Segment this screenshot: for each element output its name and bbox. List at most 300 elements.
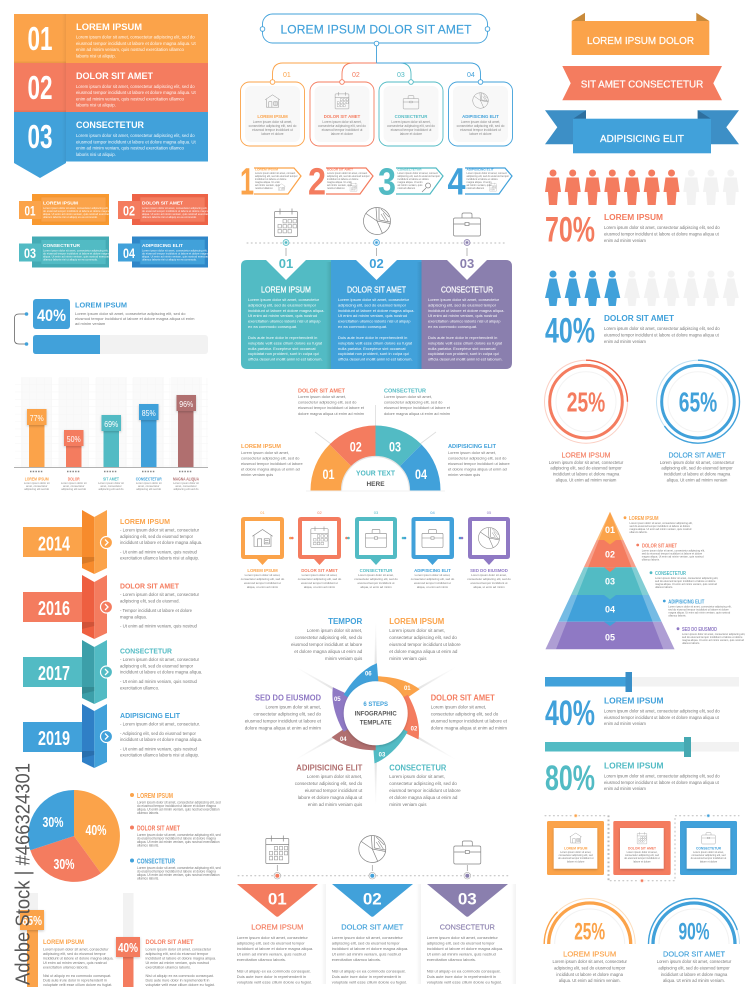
people stat 40%: Lorem ipsum dolor sit amet, consectetur adipiscing elit, sed do [604, 326, 720, 331]
step: consectetur [389, 764, 461, 807]
half ring 90%: 90% [678, 918, 710, 946]
label: lorem ipsum: et dolore magna aliqua ut enim ad [241, 466, 300, 472]
banner 01: eiusmod tempor incididunt ut labore et dolore magna aliqua. Ut [76, 41, 196, 46]
square 03: consectetur adipiscing elit, sed do [354, 577, 398, 581]
people stat 70%: 70% [545, 210, 595, 250]
step: dolor sit amet: dolore magna aliqua ut enim ad minim [431, 726, 507, 730]
40% bar [116, 893, 216, 987]
triangle 02: DOLOR SIT AMET [341, 922, 404, 932]
pyramid label 3: ullamco laboris. [655, 585, 673, 589]
arrow 3: adipiscing elit, sed do eiusmod tempor [398, 175, 440, 178]
triangle 01: Lorem ipsum dolor sit amet, consectetur [237, 935, 309, 940]
axis labels: MAGNA ALIQUA [173, 476, 199, 482]
center label: 6 STEPS [363, 702, 388, 708]
axis label captions: Lorem ipsum dolor sit [98, 481, 124, 485]
bar 85%: 85% [142, 409, 156, 418]
step: consectetur: Lorem ipsum dolor sit amet, [389, 774, 445, 779]
column 03: voluptate velit esse cillum dolore eu fugiat [428, 340, 503, 346]
column 02: adipiscing elit, sed do eiusmod tempor [338, 302, 407, 308]
square coral: consectetur adipiscing elit, sed [625, 854, 660, 857]
timeline 2019: exercitation ullamco laboris nisi ut aliquip. [120, 752, 199, 758]
icon: briefcase [454, 213, 480, 236]
timeline 2017: incididunt ut labore et dolore magna aliqua. [120, 670, 202, 674]
square coral [613, 821, 671, 875]
pyramid label 5: Lorem ipsum dolor sit amet, consectetur adipiscing elit, [682, 632, 745, 636]
timeline 2019: 2019 [38, 728, 70, 750]
box 02: eiusmod tempor incididunt ut [322, 128, 362, 132]
pyramid layers [546, 512, 674, 649]
65% bar: Lorem ipsum dolor sit amet, consectetur [43, 948, 109, 952]
column 03: Lorem ipsum dolor sit amet, consectetur [428, 297, 500, 302]
pie legend: do eiusmod tempor incididunt ut labore et dolore magna [137, 836, 216, 840]
banner 02: eiusmod tempor incididunt ut labore et dolore magna aliqua. Ut [76, 90, 196, 95]
card 02: do eiusmod tempor incididunt ut labore et dolore magna [142, 209, 209, 213]
label: adipisicing elit: et dolore magna aliqua ut enim ad [448, 466, 507, 472]
column 01: officia deserunt mollit anim id est laborum. [248, 356, 323, 362]
card 02 [118, 194, 213, 225]
step: dolor sit amet: Lorem ipsum dolor sit amet, [431, 704, 486, 710]
triangle 03: 03 [458, 890, 477, 908]
box 04: eiusmod tempor incididunt ut [460, 128, 501, 132]
square 04: 04 [430, 510, 435, 515]
box 02: DOLOR SIT AMET [324, 114, 361, 119]
banner 01: Lorem ipsum dolor sit amet, consectetur adipiscing elit, sed do [76, 34, 195, 40]
step: sed do eiusmod [245, 694, 322, 730]
people stat 70%: enim ad minim veniam [604, 238, 646, 243]
column 02: nulla pariatur. Excepteur sint occaecat [338, 346, 406, 351]
arrow 2: ad minim veniam, quis [327, 184, 353, 187]
card 03: Lorem ipsum dolor sit amet, consectetur adipiscing elit, sed [43, 248, 114, 252]
column 01: ex ea commodo consequat. [248, 324, 297, 329]
icon: calendar [274, 208, 298, 236]
timeline 2016: adipiscing elit, sed do eiusmod. [120, 598, 180, 604]
65% bar: Nisi ut aliquip ex ea commodo consequat. [43, 974, 111, 978]
square 04: eiusmod tempor incididunt ut [414, 581, 451, 585]
banner 03: Lorem ipsum dolor sit amet, consectetur adipiscing elit, sed do [76, 133, 195, 138]
arrow 3: magna aliqua. Ut enim [398, 181, 423, 184]
pie legend: Lorem ipsum dolor sit amet, consectetur adipiscing elit, sed [137, 833, 221, 837]
step: lorem ipsum: eiusmod tempor incididunt ut labore [389, 642, 461, 647]
panel: big number arrows [240, 162, 512, 204]
axis label captions: Lorem ipsum dolor sit [61, 481, 87, 485]
box 03: consectetur adipiscing elit, sed do [387, 124, 435, 128]
triangle 02: adipiscing elit, sed do eiusmod tempor [332, 940, 400, 946]
label: dolor sit amet: DOLOR SIT AMET [298, 388, 346, 394]
triangle 01: incididunt ut labore et dolore magna aliqua. [237, 946, 313, 951]
panel: three triangles [237, 836, 516, 985]
axis labels: DOLOR [68, 476, 80, 482]
ring 25%: aliqua. Ut enim ad minim veniam [556, 478, 617, 482]
triangle 01: LOREM IPSUM [251, 922, 303, 932]
column 02: incididunt ut labore et dolore magna aliqua. [338, 308, 414, 313]
65% bar: LOREM IPSUM [43, 940, 84, 946]
axis label captions: amet, consectetur [100, 484, 122, 488]
progress stat 40%: LOREM IPSUM [604, 696, 664, 706]
timeline 2019: - Adipiscing elit, sed do eiusmod tempor [120, 731, 197, 736]
pyramid label 4: magna aliqua. Ut enim ad minim veniam, quis nostrud [668, 610, 731, 614]
ring 65%: incididunt ut labore et dolore magna [664, 472, 731, 476]
square orange: labore et dolore [567, 860, 585, 864]
pie legend: Lorem ipsum dolor sit amet, consectetur adipiscing elit, sed [137, 866, 221, 870]
step: adipisicing elit [295, 764, 363, 807]
arrow 3: nostrud ullamco [398, 187, 416, 190]
column 02: cupidatat non proident, sunt in culpa qui [338, 351, 409, 356]
label: consectetur: consectetur adipiscing elit, sed do [384, 400, 442, 404]
center label [355, 702, 397, 726]
timeline 2016: magna aliqua. [120, 614, 147, 620]
65% bar: 65% [22, 913, 42, 928]
timeline 2017: CONSECTETUR [120, 646, 173, 656]
axis label captions: amet, consectetur [26, 484, 47, 488]
pyramid label 1: Lorem ipsum dolor sit amet, consectetur adipiscing elit, [630, 521, 693, 525]
pie legend: aliqua. Ut enim ad minim veniam, quis nostrud exercitation [137, 873, 220, 877]
card 02: Lorem ipsum dolor sit amet, consectetur adipiscing elit, sed [142, 206, 213, 210]
column 02 [331, 256, 422, 369]
65% bar: Duis aute irure dolor in reprehenderit in [43, 978, 107, 982]
column 01: cupidatat non proident, sunt in culpa qui [248, 351, 319, 356]
triangle 02: 02 [363, 890, 382, 908]
card 04: aliqua. Ut enim ad minim veniam, quis nostrud exercitation [142, 254, 212, 258]
ribbon 1: LOREM IPSUM DOLOR [587, 36, 694, 47]
axis label captions: adipiscing elit sed do [61, 487, 87, 491]
pie chart: 40% [86, 822, 106, 839]
pyramid label 5: SED DO EIUSMOD [682, 627, 717, 633]
card 03: aliqua. Ut enim ad minim veniam, quis nostrud exercitation [43, 254, 113, 258]
box 04: ADIPISICING ELIT [462, 114, 499, 119]
pie legend [130, 791, 221, 880]
card 03 [19, 236, 114, 268]
arrow 2 [308, 162, 373, 204]
label: dolor sit amet: dolore magna aliqua ut enim ad minim [298, 411, 364, 416]
pyramid label 2: Lorem ipsum dolor sit amet, consectetur adipiscing elit, [642, 548, 705, 552]
ribbon 2 [562, 66, 722, 100]
column 02: ex ea commodo consequat. [338, 324, 387, 329]
square coral: labore et dolore [633, 860, 651, 864]
banner 03: enim ad minim veniam, quis nostrud exercitation ullamco [76, 146, 185, 150]
axis label captions: adipiscing elit sed do [136, 487, 162, 491]
arrow 1: nostrud ullamco [255, 187, 273, 190]
progress stat 40%: 40% [545, 694, 595, 733]
progress stat 40% [545, 672, 739, 733]
pyramid label 4: Lorem ipsum dolor sit amet, consectetur adipiscing elit, [668, 604, 732, 608]
pyramid label 4: ADIPISICING ELIT [668, 599, 705, 605]
arrow 1 [240, 162, 301, 204]
timeline 2019: incididunt ut labore et dolore magna aliqua. [120, 737, 202, 742]
ring 65%: adipiscing elit, sed do eiusmod tempor [661, 466, 733, 470]
timeline 2017: adipiscing elit, sed do eiusmod tempor [120, 664, 194, 668]
half ring 90%: adipiscing elit, sed do eiusmod tempor [658, 966, 730, 970]
panel: semicircle diagram [241, 388, 510, 491]
pyramid label 1: ullamco laboris. [630, 530, 648, 534]
step: lorem ipsum: minim veniam quis [389, 656, 427, 661]
step: consectetur: eiusmod tempor incididunt ut labore [389, 788, 461, 793]
card 03: do eiusmod tempor incididunt ut labore et dolore magna [43, 252, 110, 256]
card 01: do eiusmod tempor incididunt ut labore et dolore magna [43, 209, 110, 213]
pyramid label 1 [624, 516, 693, 534]
square 02: 02 [317, 510, 322, 515]
timeline 2014: incididunt ut labore et dolore magna aliqua. [120, 540, 202, 545]
label: consectetur: dolore magna aliqua ut enim ad minim [384, 411, 450, 416]
square 03: Lorem ipsum dolor sit amet, [358, 573, 394, 577]
square 04: aliqua, ut enim ad minim [417, 585, 449, 589]
step: tempor: consectetur adipiscing elit, sed do [295, 635, 363, 640]
square 03: aliqua, ut enim ad minim [360, 585, 392, 589]
title frame: LOREM IPSUM DOLOR SIT AMET [280, 22, 472, 36]
65% bar: voluptate velit esse cillum dolore eu fugiat. [43, 983, 112, 987]
progress stat 80%: eiusmod tempor incididunt ut labore et dolore magna aliqua ut [604, 780, 720, 785]
arrow 4: ADIPISICING ELIT [466, 168, 494, 172]
ribbon 3 [545, 110, 739, 153]
half ring 90%: Lorem ipsum dolor sit amet, consectetur [657, 959, 732, 964]
timeline 2017: 2017 [38, 663, 70, 685]
step: sed do eiusmod: Lorem ipsum dolor sit amet, [265, 704, 321, 710]
people stat 40%: enim ad minim veniam [604, 339, 646, 344]
banner 02 [14, 63, 208, 112]
pictogram row [545, 270, 739, 306]
panel: semicircle diagram: 02 [350, 438, 362, 454]
box 01: 01 [283, 72, 291, 79]
label: dolor sit amet [298, 388, 365, 416]
square 02: consectetur adipiscing elit, sed do [298, 577, 342, 581]
panel: 40% progress bar: 40% [37, 306, 66, 325]
label: adipisicing elit: consectetur adipiscing elit, sed do [448, 456, 506, 460]
40% bar: Nisi ut aliquip ex ea commodo consequat. [146, 974, 214, 978]
ring 25%: 25% [567, 387, 605, 418]
arrow 2: magna aliqua. Ut enim [327, 181, 352, 184]
timeline 2014: - Ut enim ad minim veniam, quis nostrud [120, 550, 198, 554]
column 01: Lorem ipsum dolor sit amet, consectetur [248, 297, 320, 302]
timeline 2017: - Lorem ipsum dolor sit amet, consectetur [120, 657, 200, 662]
triangle 03: incididunt ut labore et dolore magna aliqua. [427, 946, 503, 951]
people stat 70%: Lorem ipsum dolor sit amet, consectetur adipiscing elit, sed do [604, 225, 720, 230]
label: dolor sit amet: consectetur adipiscing elit, sed do [298, 400, 356, 404]
box 03: labore et dolore [400, 132, 422, 136]
axis label captions: adipiscing elit sed do [99, 487, 124, 491]
banner 02: 02 [28, 69, 52, 106]
column 01: 01 [279, 256, 293, 271]
axis labels [25, 476, 199, 482]
label: lorem ipsum: minim veniam quis [241, 472, 273, 477]
square 03: eiusmod tempor incididunt ut [358, 581, 395, 585]
banner 02: DOLOR SIT AMET [76, 71, 153, 82]
axis labels: CONSECTETUR [136, 476, 162, 482]
bar 96% [176, 395, 196, 467]
arrow 2: adipiscing elit, sed do eiusmod tempor [327, 175, 370, 178]
step: sed do eiusmod: consectetur adipiscing elit, sed do [253, 712, 321, 716]
arrow 4 [448, 162, 512, 204]
triangle 02: voluptate velit esse cillum dolore eu fugiat. [332, 980, 407, 985]
square 05: SED DO EIUSMOD [470, 568, 508, 573]
pyramid label 5: magna aliqua. Ut enim ad minim veniam, quis nostrud [682, 638, 744, 642]
ring 65%: DOLOR SIT AMET [668, 452, 726, 460]
column 01 [241, 256, 331, 369]
label: adipisicing elit [448, 444, 510, 477]
box 04 [448, 72, 512, 146]
column 01: Ut enim ad minim veniam, quis nostrud [248, 313, 317, 318]
triangle 01: voluptate velit esse cillum dolore eu fugiat. [237, 980, 312, 985]
column 02: officia deserunt mollit anim id est laborum. [338, 356, 413, 362]
box 04: consectetur adipiscing elit, sed do [457, 124, 505, 128]
card 01: LOREM IPSUM [43, 200, 78, 206]
bar 77%: 77% [30, 414, 44, 423]
square 02: aliqua, ut enim ad minim [304, 585, 336, 589]
card 02: ullamco laboris nisi ut aliquip ex ea commodo. [142, 215, 197, 219]
square 01: eiusmod tempor incididunt ut [244, 581, 281, 585]
step: dolor sit amet: eiusmod tempor incididunt ut labore et [431, 718, 508, 724]
step: sed do eiusmod: dolore magna aliqua ut enim ad minim [245, 726, 321, 730]
banner 01: LOREM IPSUM [76, 22, 142, 33]
half ring 25% [544, 898, 635, 983]
square orange: LOREM IPSUM [564, 846, 588, 850]
progress stat 80%: Lorem ipsum dolor sit amet, consectetur adipiscing elit, sed do [604, 774, 720, 778]
people stat 70%: LOREM IPSUM [604, 213, 663, 222]
square 02: eiusmod tempor incididunt ut [301, 581, 338, 585]
label: dolor sit amet: Lorem ipsum dolor sit amet, [298, 394, 346, 399]
progress stat 80%: enim ad minim veniam [604, 786, 646, 791]
banner 01 [14, 14, 208, 63]
box 01 [240, 72, 304, 146]
box 04: Lorem ipsum dolor sit amet, [461, 120, 500, 124]
panel: vertical timeline [23, 510, 202, 768]
step: tempor: TEMPOR [328, 617, 363, 626]
step: sed do eiusmod: eiusmod tempor incididunt ut labore et [245, 718, 322, 724]
label: adipisicing elit: Lorem ipsum dolor sit amet, [448, 450, 496, 455]
progress stat 40%: enim ad minim veniam [604, 721, 646, 726]
ring 65%: Lorem ipsum dolor sit amet, consectetur [660, 460, 735, 465]
square coral: do eiusmod tempor incididunt ut [624, 857, 660, 860]
label: lorem ipsum [241, 444, 303, 477]
arrow 2: nostrud ullamco [327, 187, 345, 190]
40% bar: exercitation ullamco laboris. [146, 966, 191, 970]
column 03: Ut enim ad minim veniam, quis nostrud [428, 313, 497, 318]
step: tempor: minim veniam quis [325, 656, 363, 661]
square 01: LOREM IPSUM [247, 568, 278, 573]
column 03: ex ea commodo consequat. [428, 324, 477, 329]
center label: TEMPLATE [360, 720, 392, 726]
square coral: DOLOR SIT AMET [628, 846, 656, 850]
ring 25%: LOREM IPSUM [562, 452, 611, 460]
column 03: exercitation ullamco laboris nisi ut aliquip [428, 318, 501, 324]
step: dolor sit amet [431, 694, 508, 730]
arrow 1: magna aliqua. Ut enim [255, 181, 280, 184]
card 01: Lorem ipsum dolor sit amet, consectetur adipiscing elit, sed [43, 206, 114, 210]
panel: five icon squares [241, 510, 511, 589]
panel: numbered stacked banners [14, 14, 208, 178]
box 04: 04 [467, 72, 475, 79]
65% bar [20, 893, 114, 987]
timeline 2019: - Ut enim ad minim veniam, quis nostrud [120, 746, 198, 752]
column 03: 03 [460, 256, 474, 271]
half ring 90%: DOLOR SIT AMET [663, 950, 725, 958]
step: consectetur: CONSECTETUR [389, 764, 447, 772]
column 01: Duis aute irure dolor in reprehenderit in [248, 335, 317, 340]
triangle 02: Duis aute irure dolor in reprehenderit in [332, 974, 401, 979]
half ring 25%: aliqua. Ut enim ad minim veniam. [559, 978, 621, 983]
card 03: 03 [24, 245, 36, 261]
step: adipisicing elit: ADIPISICING ELIT [296, 764, 362, 772]
pyramid label 2: ullamco laboris. [642, 558, 660, 562]
center label: INFOGRAPHIC [355, 712, 397, 718]
panel: pyramid: 03 [605, 576, 615, 586]
half ring 90%: aliqua. Ut enim ad minim veniam. [663, 978, 725, 983]
square orange [547, 821, 604, 875]
triangle 02: Lorem ipsum dolor sit amet, consectetur [332, 935, 404, 940]
triangle 03 [427, 884, 508, 985]
panel: six steps circle: 04 [340, 737, 347, 743]
square 04 [411, 510, 455, 589]
bar 50% [64, 430, 84, 467]
panel: vertical percent bars [20, 893, 216, 987]
square 05: consectetur adipiscing elit, sed do [467, 577, 511, 581]
box 03: CONSECTETUR [395, 114, 428, 119]
panel: tree diagram [240, 14, 512, 146]
arrow 2: incididunt ut labore et dolore [327, 178, 359, 181]
half ring 25%: adipiscing elit, sed do eiusmod tempor [554, 966, 626, 970]
square 02: DOLOR SIT AMET [301, 568, 338, 573]
panel: pyramid [546, 512, 745, 649]
half ring 25%: Lorem ipsum dolor sit amet, consectetur [552, 959, 628, 964]
people stat 40% [545, 270, 739, 350]
arrow 4: Lorem ipsum dolor sit amet, consect [466, 172, 507, 175]
pie legend: Lorem ipsum dolor sit amet, consectetur adipiscing elit, sed [137, 800, 221, 804]
timeline 2014: adipiscing elit, sed do eiusmod tempor [120, 534, 194, 539]
box 02 [310, 72, 374, 146]
pyramid label 4: sed do eiusmod tempor incididunt ut labore et dolore [668, 608, 729, 612]
panel: semicircle diagram: 03 [389, 438, 401, 454]
pyramid label 1: magna aliqua. Ut enim ad minim veniam, quis nostrud [630, 527, 692, 531]
half ring 25%: LOREM IPSUM [563, 950, 616, 958]
step: adipisicing elit: enim ad minim veniam quis [308, 802, 363, 807]
pie chart: 30% [42, 814, 64, 831]
banner 01: enim ad minim veniam, quis nostrud exercitation ullamco [76, 47, 185, 52]
triangle 03: adipiscing elit, sed do eiusmod tempor [427, 940, 495, 946]
banner 02: laboris nisi ut aliquip. [76, 102, 116, 108]
ring 65% [656, 360, 740, 482]
box 01: eiusmod tempor incididunt ut [252, 128, 293, 132]
arrow 1: 1 [240, 162, 254, 204]
box 01: Lorem ipsum dolor sit amet, [253, 120, 292, 124]
timeline 2014: 2014 [38, 534, 71, 556]
pyramid label 5: ullamco laboris. [682, 641, 700, 645]
card 02: aliqua. Ut enim ad minim veniam, quis nostrud exercitation [142, 212, 212, 216]
40% bar: 40% [118, 940, 138, 955]
column 03: nulla pariatur. Excepteur sint occaecat [428, 346, 496, 351]
square 05: aliqua, ut enim ad minim [473, 585, 505, 589]
card 01: aliqua. Ut enim ad minim veniam, quis nostrud exercitation [43, 212, 113, 216]
label: lorem ipsum: Lorem ipsum dolor sit amet, [241, 450, 289, 455]
segment 02 [330, 425, 376, 466]
icon: briefcase [454, 841, 481, 864]
column 03: cupidatat non proident, sunt in culpa qui [428, 351, 499, 356]
arrow 2: DOLOR SIT AMET [327, 168, 353, 172]
step: adipisicing elit: labore et dolore magna aliqua ut [298, 795, 363, 800]
step: lorem ipsum: LOREM IPSUM [389, 617, 445, 626]
stock watermark: Adobe Stock | #466324301 [12, 763, 34, 985]
triangle 01 [237, 884, 318, 985]
card 01: ullamco laboris nisi ut aliquip ex ea commodo. [43, 215, 98, 219]
square 02 [298, 510, 342, 589]
arrow 4: nostrud ullamco [466, 187, 485, 190]
arrow 4: incididunt ut labore et dolore [466, 178, 499, 181]
pyramid label 1: LOREM IPSUM [629, 516, 659, 522]
pyramid label 1: sed do eiusmod tempor incididunt ut labore et dolore [630, 524, 690, 528]
step: lorem ipsum: consectetur adipiscing elit, sed do [389, 635, 457, 640]
ring 25% [544, 360, 628, 482]
box 02: Lorem ipsum dolor sit amet, [322, 120, 362, 124]
pyramid label 3: Lorem ipsum dolor sit amet, consectetur adipiscing elit, [655, 576, 718, 580]
half ring 25%: 25% [574, 918, 605, 946]
pie legend: do eiusmod tempor incididunt ut labore et dolore magna [137, 870, 216, 874]
